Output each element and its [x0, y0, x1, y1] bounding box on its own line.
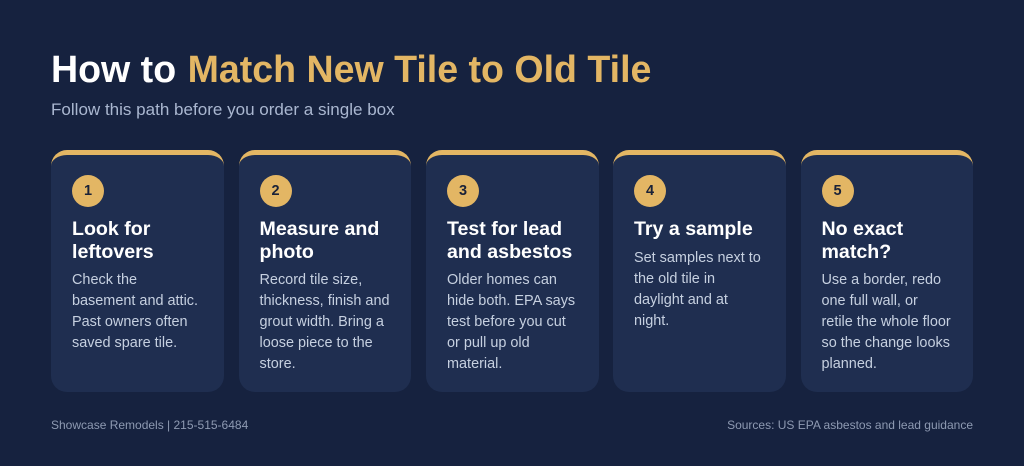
text: step 2: grout width. Bring a: [260, 314, 384, 330]
subtitle: Follow this path before you order a single box: [51, 100, 395, 119]
text: step 5: retile the whole floor: [822, 314, 951, 330]
text: step 1: basement and attic.: [72, 293, 198, 309]
icon: number 3: [447, 175, 479, 207]
text: step 5: so the change looks: [822, 335, 950, 351]
text: step 5: Use a border, redo: [822, 272, 941, 288]
icon: number 1: [72, 175, 104, 207]
heading: step 1: [72, 218, 154, 263]
text: step 4: daylight and at: [634, 292, 728, 308]
text: step 4: the old tile in: [634, 271, 715, 287]
icon: number 2: 2: [271, 183, 280, 199]
text: step 3: or pull up old: [447, 335, 530, 351]
icon: number 2: [260, 175, 292, 207]
heading: step 2: Measure and: [260, 218, 379, 240]
text: step 2: loose piece to the: [260, 335, 373, 351]
text: step 2: store.: [260, 356, 296, 372]
text: step 3: hide both. EPA says: [447, 293, 575, 309]
heading: step 1: Look for: [72, 218, 150, 240]
text: step 2: thickness, finish and: [260, 293, 390, 309]
text: step 4: Set samples next to: [634, 250, 761, 266]
panel: step 2: [238, 150, 411, 392]
icon: number 1: 1: [84, 183, 92, 199]
text: step 2: Record tile size,: [260, 272, 362, 288]
text: step 4: [634, 250, 761, 329]
heading: step 4: Try a sample: [634, 218, 753, 240]
text: step 3: test before you cut: [447, 314, 566, 330]
icon: number 5: 5: [833, 183, 842, 199]
text: step 4: night.: [634, 313, 669, 329]
title: How to Match New Tile to Old Tile: [51, 48, 651, 90]
panel: step 4: [613, 150, 786, 392]
text: step 5: one full wall, or: [822, 293, 918, 309]
heading: step 2: [260, 218, 379, 263]
text: step 1: Past owners often: [72, 314, 188, 330]
icon: number 3: 3: [459, 183, 467, 199]
text: step 3: [447, 272, 575, 372]
icon: number 5: [822, 175, 854, 207]
text: step 5: [822, 272, 951, 372]
footer: sources: Sources: US EPA asbestos and lead guidance: [727, 418, 973, 432]
panel: step 5: [800, 150, 973, 392]
icon: number 4: 4: [646, 183, 654, 199]
heading: step 1: leftovers: [72, 241, 154, 263]
heading: step 3: and asbestos: [447, 241, 572, 263]
heading: step 5: [822, 218, 903, 263]
panel: step 1: [51, 150, 224, 392]
heading: step 5: match?: [822, 241, 891, 263]
footer: contact: Showcase Remodels | 215-515-6484: [51, 418, 248, 432]
text: step 1: saved spare tile.: [72, 335, 177, 351]
text: step 2: [260, 272, 390, 372]
heading: step 2: photo: [260, 241, 314, 263]
text: step 3: material.: [447, 356, 502, 372]
text: step 1: [72, 272, 198, 351]
text: step 5: planned.: [822, 356, 877, 372]
heading: step 5: No exact: [822, 218, 903, 240]
panel: step 3: [426, 150, 598, 392]
text: step 3: Older homes can: [447, 272, 557, 288]
heading: step 3: [447, 218, 572, 263]
heading: step 3: Test for lead: [447, 218, 562, 240]
icon: number 4: [634, 175, 666, 207]
text: step 1: Check the: [72, 272, 137, 288]
